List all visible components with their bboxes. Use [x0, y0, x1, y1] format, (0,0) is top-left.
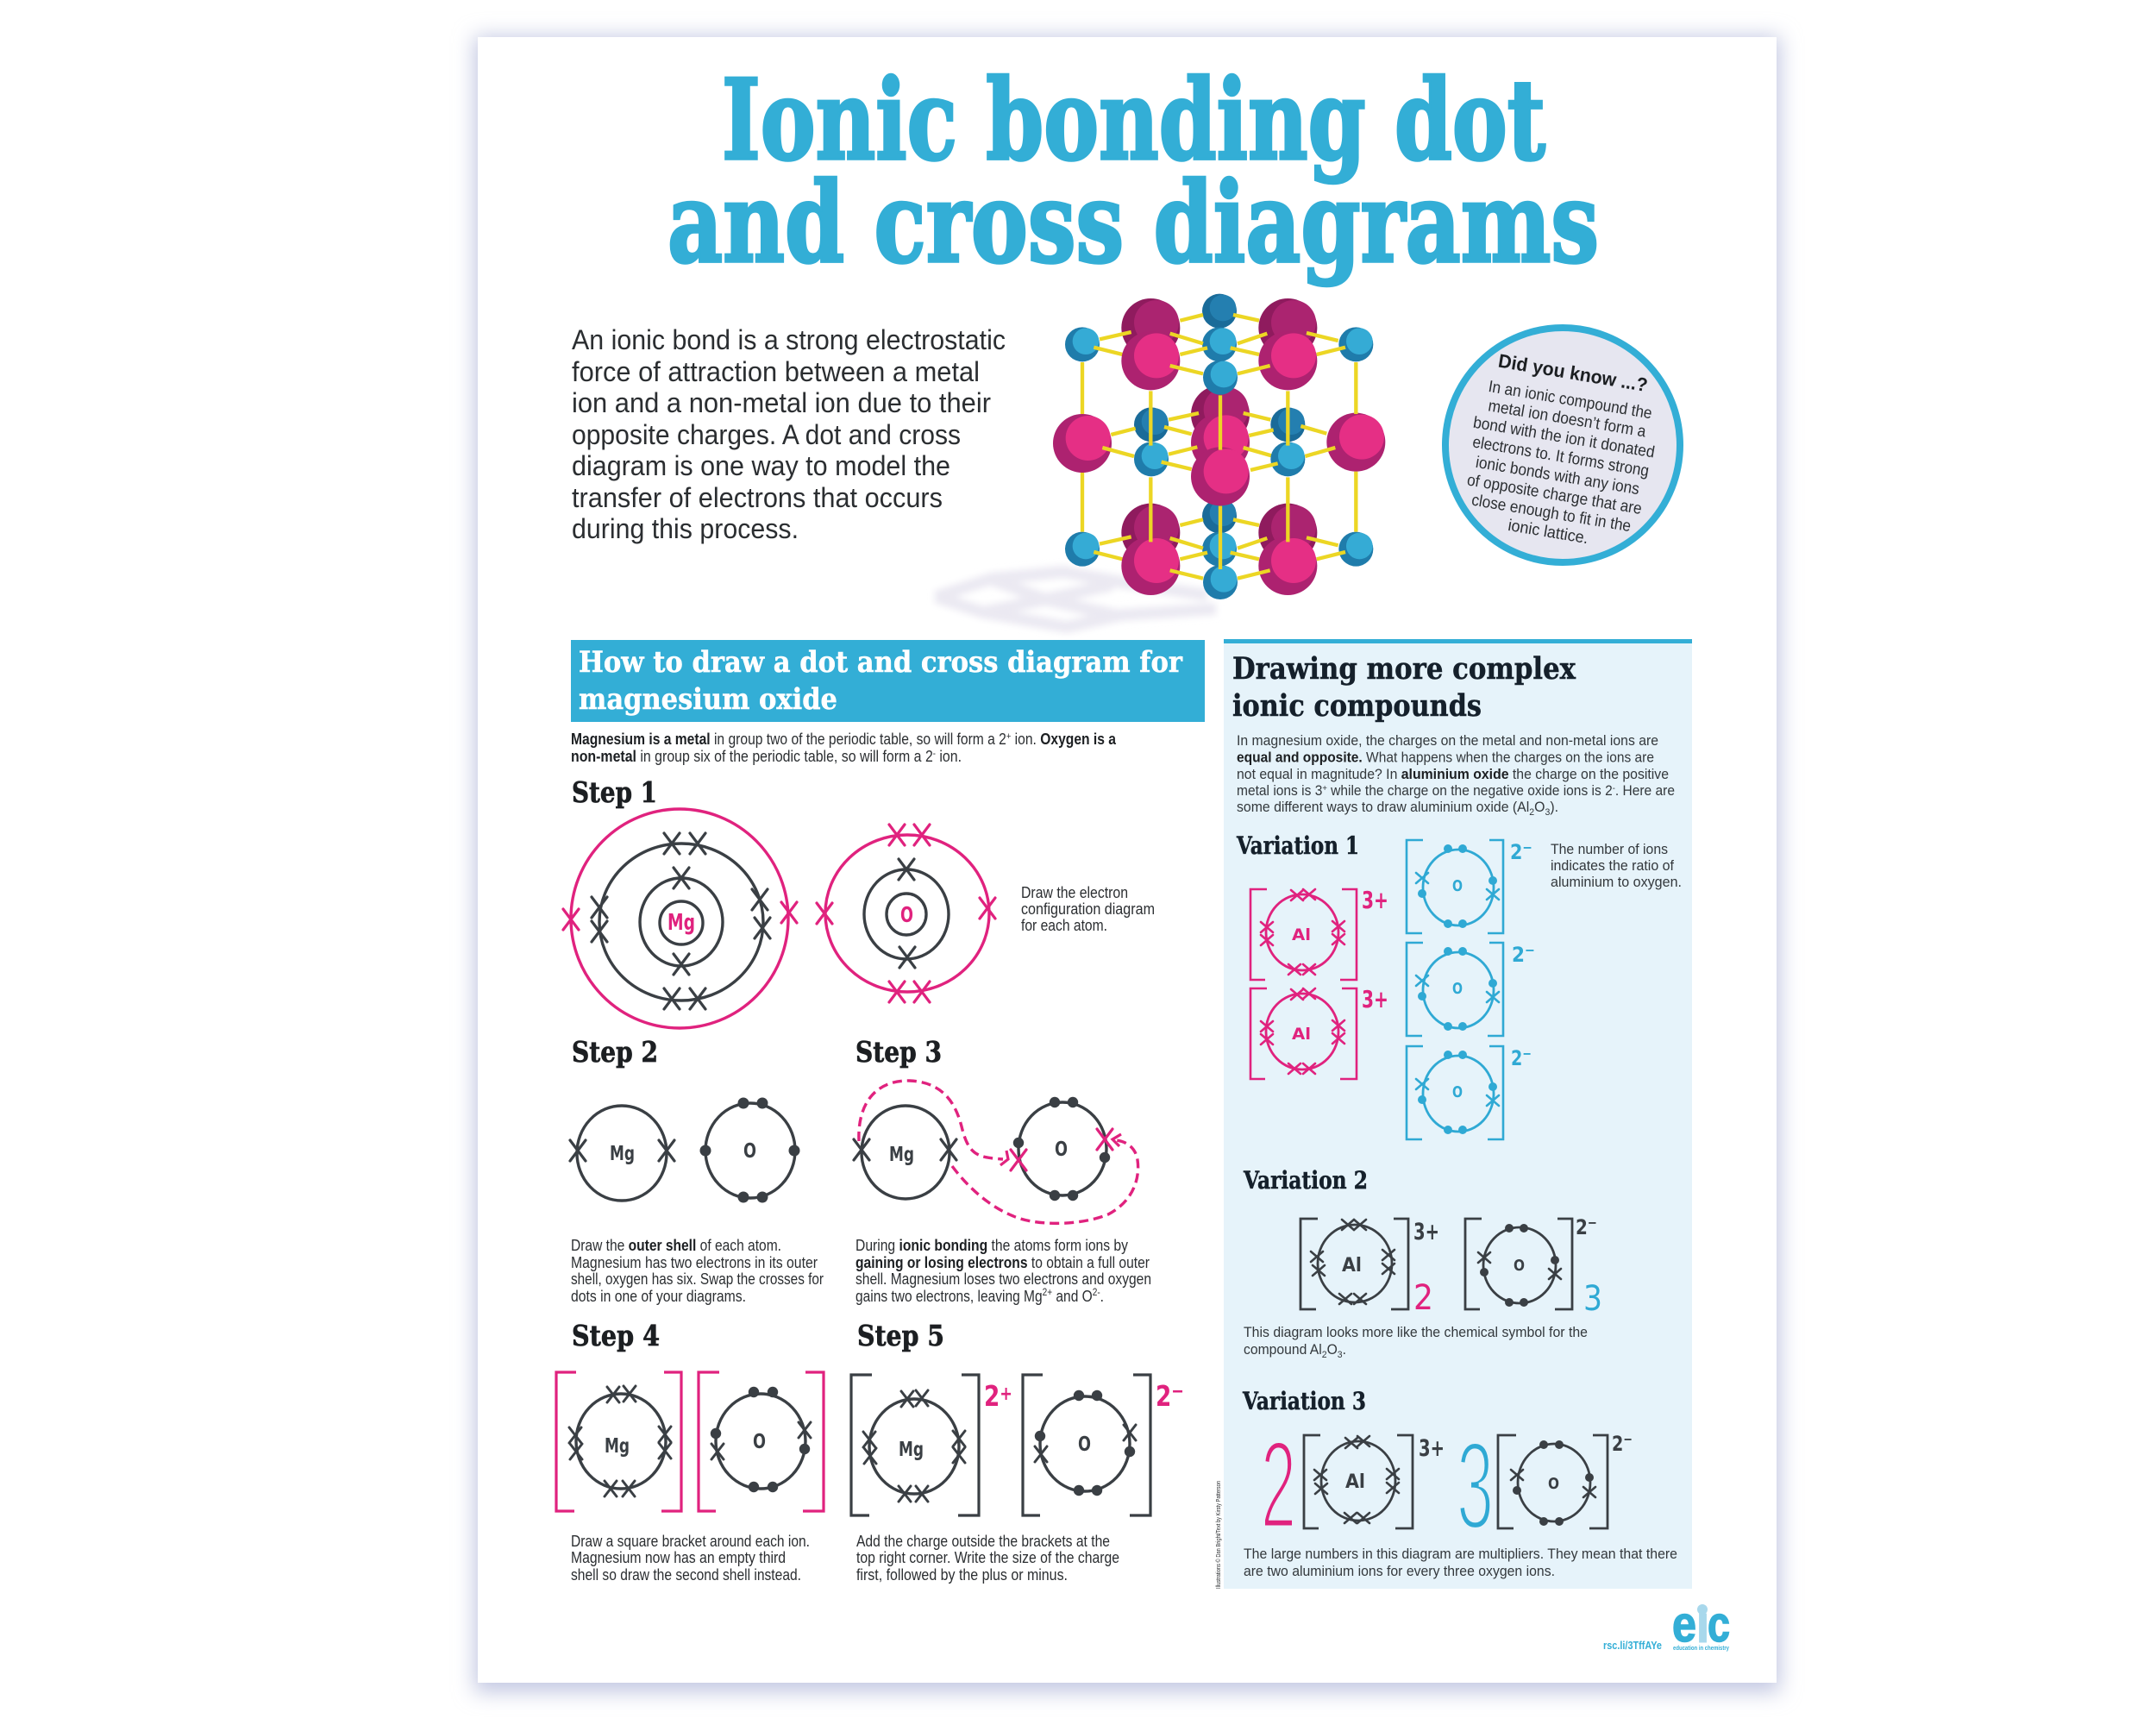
step 3 text: 2+: [1043, 1286, 1052, 1298]
diagram: step 2 outer shells: Mg: [610, 1143, 635, 1165]
heading: step 5: Step 5: [857, 1319, 944, 1352]
step 2 text: [571, 1236, 824, 1305]
variation 2 text: .: [1343, 1342, 1346, 1358]
diagram: variation 1 oxide ion bottom: 2: [1511, 1046, 1526, 1070]
callout: did you know: electrons to. It forms strong: [1471, 433, 1651, 480]
diagram: step 3 electron transfer: O: [1055, 1138, 1068, 1161]
lattice lower vertical bonds: [1082, 472, 1356, 569]
variation 2 text: [1244, 1325, 1588, 1360]
step 3 text: During ionic bonding the atoms form ions by: [856, 1236, 1129, 1254]
arrow: electron one head: [1000, 1151, 1008, 1165]
diagram: variation 1 aluminium ion bottom: [1250, 985, 1388, 1079]
diagram: variation 3: [1261, 1415, 1633, 1555]
step 3 text: gaining or losing electrons to obtain a full outer: [856, 1253, 1150, 1271]
diagram: variation 2: 2: [1413, 1278, 1433, 1318]
logo: eic: [1672, 1596, 1730, 1653]
diagram: step 5 charges: 2: [1156, 1379, 1175, 1413]
panel intro text: ).: [1550, 800, 1558, 815]
step 1 text: Draw the electron: [1021, 883, 1128, 901]
diagram: step 1 magnesium atom: [563, 809, 797, 1028]
panel intro text: +: [1322, 784, 1327, 794]
heading: step 2: Step 2: [572, 1035, 658, 1069]
diagram: variation 2: −: [1588, 1214, 1597, 1231]
variation 2 text: This diagram looks more like the chemical symbol for the: [1244, 1325, 1588, 1340]
heading: variation 3: Variation 3: [1242, 1387, 1366, 1415]
diagram: variation 1 aluminium ion bottom: Al: [1292, 1025, 1311, 1044]
diagram: variation 2: Al: [1342, 1255, 1362, 1276]
panel intro text: . Here are: [1615, 783, 1675, 799]
diagram: step 4 brackets: O: [753, 1431, 766, 1453]
callout: did you know: ionic lattice.: [1507, 517, 1589, 548]
diagram: variation 3: 3: [1457, 1416, 1494, 1555]
diagram: variation 1 aluminium ion top: [1250, 886, 1388, 980]
variation 3 text: The large numbers in this diagram are multipliers. They mean that there: [1244, 1546, 1677, 1562]
diagram: variation 1 oxide ion middle: O: [1452, 980, 1463, 998]
step 3 text: .: [1100, 1287, 1104, 1305]
diagram: variation 1 oxide ion middle: −: [1525, 942, 1535, 958]
step 2 text: shell, oxygen has six. Swap the crosses for: [571, 1270, 824, 1288]
step 1 text: configuration diagram: [1021, 900, 1155, 918]
diagram: variation 3: O: [1548, 1475, 1559, 1493]
panel: how to draw header: magnesium oxide: [579, 682, 837, 717]
diagram: step 2 outer shells: O: [743, 1140, 756, 1163]
diagram: step 1 oxygen atom: [817, 825, 995, 1002]
page sheet: [478, 37, 1777, 1683]
step 5 text: first, followed by the plus or minus.: [856, 1565, 1068, 1584]
arrow: electron one: [859, 1081, 1003, 1159]
panel intro text: equal and opposite. What happens when the charges on the ions are: [1237, 750, 1654, 766]
logo: eic: education in chemistry: [1673, 1644, 1730, 1652]
variation 2 text: 2: [1322, 1350, 1327, 1360]
intro paragraph: opposite charges. A dot and cross: [572, 419, 961, 450]
step 3 text: shell. Magnesium loses two electrons and oxygen: [856, 1270, 1151, 1288]
panel: more complex compounds: [1224, 639, 1692, 1589]
heading: variation 1: Variation 1: [1236, 831, 1359, 860]
diagram: variation 1 oxide ion bottom: −: [1522, 1045, 1532, 1062]
diagram: step 5 charges: −: [1171, 1381, 1184, 1402]
step 4 text: Draw a square bracket around each ion.: [571, 1532, 810, 1550]
step 2 text: Magnesium has two electrons in its outer: [571, 1253, 818, 1271]
title: and cross diagrams: [667, 159, 1599, 288]
panel intro text: [1237, 733, 1675, 818]
intro paragraph: [572, 324, 1006, 544]
panel intro text: metal ions is 3: [1237, 783, 1327, 799]
diagram: variation 1 aluminium ion bottom: 3+: [1362, 985, 1388, 1013]
panel intro text: -: [1613, 784, 1615, 794]
intro paragraph: force of attraction between a metal: [572, 356, 980, 387]
panel intro text: O: [1534, 800, 1545, 815]
step 3 text: gains two electrons, leaving Mg: [856, 1287, 1078, 1305]
logo: eic: e: [1672, 1596, 1696, 1653]
diagram: step 1 oxygen atom: O: [900, 902, 913, 927]
panel intro text: 3: [1545, 807, 1550, 818]
diagram: variation 3: 3+: [1419, 1435, 1445, 1462]
heading: step 4: Step 4: [572, 1319, 660, 1352]
panel intro text: In magnesium oxide, the charges on the metal and non-metal ions are: [1237, 733, 1658, 749]
diagram: step 2 outer shells: [570, 1097, 800, 1202]
step 5 text: top right corner. Write the size of the charge: [856, 1548, 1119, 1566]
variation 3 text: are two aluminium ions for every three oxygen ions.: [1244, 1564, 1555, 1579]
callout: did you know: Did you know ...?: [1497, 350, 1649, 396]
step 1 text: for each atom.: [1021, 916, 1107, 934]
intro paragraph: diagram is one way to model the: [572, 450, 950, 481]
intro paragraph: An ionic bond is a strong electrostatic: [572, 324, 1006, 355]
step 5 text: [856, 1532, 1119, 1584]
illustration credit: Illustrations © Dan Bright/Text by Kirsty Patterson: [1215, 1481, 1222, 1589]
step 2 text: dots in one of your diagrams.: [571, 1287, 746, 1305]
diagram: variation 1 oxide ion middle: [1407, 942, 1535, 1036]
diagram: step 4 brackets: [556, 1372, 824, 1511]
variation 1 note: aluminium to oxygen.: [1551, 875, 1682, 890]
variation 1 note: The number of ions: [1551, 842, 1668, 857]
diagram: step 5 charges: +: [1000, 1383, 1012, 1405]
panel intro text: some different ways to draw aluminium oxide (Al: [1237, 800, 1542, 815]
diagram: variation 1 aluminium ion top: 3+: [1362, 886, 1388, 914]
diagram: variation 1 oxide ion bottom: O: [1452, 1083, 1463, 1101]
step 4 text: shell so draw the second shell instead.: [571, 1565, 801, 1584]
lattice middle plane: [1053, 386, 1385, 505]
ionic lattice illustration: [1053, 294, 1385, 599]
diagram: step 3 electron transfer: Mg: [889, 1144, 914, 1166]
logo: eic: ı: [1697, 1596, 1708, 1653]
step 4 text: [571, 1532, 810, 1584]
diagram: variation 1 oxide ion middle: 2: [1512, 943, 1526, 967]
diagram: variation 1 oxide ion top: 2: [1510, 840, 1525, 864]
magnesium oxide intro text: non-metal in group six of the periodic table, so will form a 2: [571, 747, 981, 765]
title: Ionic bonding dot: [722, 56, 1545, 185]
callout: did you know: metal ion doesn’t form a: [1487, 397, 1647, 442]
callout: did you know: In an ionic compound the: [1487, 378, 1653, 423]
lattice upper vertical bonds: [1082, 362, 1356, 450]
magnesium oxide intro text: ion.: [1011, 730, 1040, 748]
diagram: variation 1 aluminium ion top: Al: [1292, 925, 1311, 944]
panel: how to draw header: [571, 640, 1205, 722]
magnesium oxide intro text: Oxygen is a: [1040, 730, 1117, 748]
diagram: variation 1 oxide ion top: −: [1522, 839, 1532, 856]
magnesium oxide intro text: ion.: [936, 747, 962, 765]
heading: step 1: Step 1: [572, 775, 657, 809]
variation 3 text: [1244, 1546, 1677, 1579]
diagram: step 5 charges: [851, 1375, 1184, 1515]
variation 2 text: 3: [1338, 1350, 1343, 1360]
diagram: step 1 magnesium atom: Mg: [667, 910, 695, 936]
lattice top plane: [1065, 294, 1373, 395]
diagram: step 4 brackets: Mg: [605, 1435, 630, 1458]
diagram: variation 3: −: [1623, 1431, 1633, 1447]
heading: variation 2: Variation 2: [1243, 1166, 1368, 1195]
diagram: step 5 charges: O: [1078, 1433, 1091, 1456]
variation 1 note: indicates the ratio of: [1551, 858, 1674, 874]
heading: drawing more complex: ionic compounds: [1232, 688, 1482, 724]
diagram: step 5 charges: 2: [984, 1379, 1004, 1413]
title: [667, 56, 1599, 288]
variation 2 text: O: [1327, 1342, 1338, 1358]
diagram: variation 2: [1300, 1214, 1602, 1319]
step 3 text: [856, 1236, 1151, 1305]
variation 1 note: [1551, 842, 1682, 890]
arrow: electron two: [952, 1140, 1138, 1223]
magnesium oxide intro text: Magnesium is a metal in group two of the periodic table, so will form a 2: [571, 730, 1061, 748]
panel intro text: not equal in magnitude? In aluminium oxide the charge on the positive: [1237, 767, 1669, 782]
callout: did you know: [1445, 328, 1680, 562]
callout: did you know: ionic bonds with any ions: [1475, 454, 1640, 499]
diagram: variation 1 oxide ion top: [1407, 839, 1532, 933]
intro paragraph: ion and a non-metal ion due to their: [572, 387, 991, 418]
variation 2 text: compound Al: [1244, 1342, 1326, 1358]
short link: rsc.li/3TffAYe: [1603, 1639, 1662, 1652]
heading: drawing more complex: Drawing more complex: [1232, 651, 1576, 687]
heading: step 3: Step 3: [856, 1035, 942, 1069]
lattice shadow: [936, 572, 1216, 627]
magnesium oxide intro text: [571, 730, 1117, 765]
diagram: variation 2: O: [1514, 1257, 1525, 1275]
panel: how to draw header: How to draw a dot and cross diagram for: [579, 645, 1183, 680]
arrow: electron two head: [1112, 1134, 1121, 1146]
callout: did you know: close enough to fit in the: [1470, 492, 1633, 536]
step 3 text: 2-: [1093, 1286, 1100, 1298]
diagram: step 3 electron transfer: [854, 1081, 1138, 1223]
diagram: variation 2: 3: [1583, 1279, 1602, 1319]
diagram: variation 1 oxide ion top: O: [1452, 877, 1463, 895]
diagram: variation 2: 3+: [1413, 1219, 1439, 1245]
intro paragraph: during this process.: [572, 513, 799, 544]
heading: drawing more complex: [1232, 651, 1576, 724]
magnesium oxide intro text: +: [1006, 731, 1011, 742]
step 2 text: Draw the outer shell of each atom.: [571, 1236, 781, 1254]
diagram: variation 3: 2: [1612, 1432, 1626, 1456]
diagram: variation 2: 2: [1576, 1215, 1590, 1239]
logo: eic: c: [1708, 1596, 1730, 1653]
step 1 text: [1021, 883, 1155, 934]
magnesium oxide intro text: -: [933, 749, 936, 759]
step 4 text: Magnesium now has an empty third: [571, 1548, 786, 1566]
diagram: variation 3: Al: [1345, 1471, 1365, 1493]
callout: did you know: of opposite charge that are: [1466, 471, 1643, 518]
panel intro text: 2: [1529, 807, 1534, 818]
diagram: step 5 charges: Mg: [899, 1439, 924, 1461]
intro paragraph: transfer of electrons that occurs: [572, 482, 943, 513]
panel intro text: while the charge on the negative oxide ions is 2: [1327, 783, 1613, 799]
step 3 text: and O: [1052, 1287, 1093, 1305]
page shadow: [474, 36, 1780, 1692]
diagram: variation 1 oxide ion bottom: [1407, 1045, 1532, 1139]
step 5 text: Add the charge outside the brackets at the: [856, 1532, 1110, 1550]
lattice bottom plane: [1065, 499, 1373, 599]
callout: did you know: bond with the ion it donated: [1472, 414, 1656, 462]
diagram: variation 3: 2: [1261, 1415, 1296, 1554]
